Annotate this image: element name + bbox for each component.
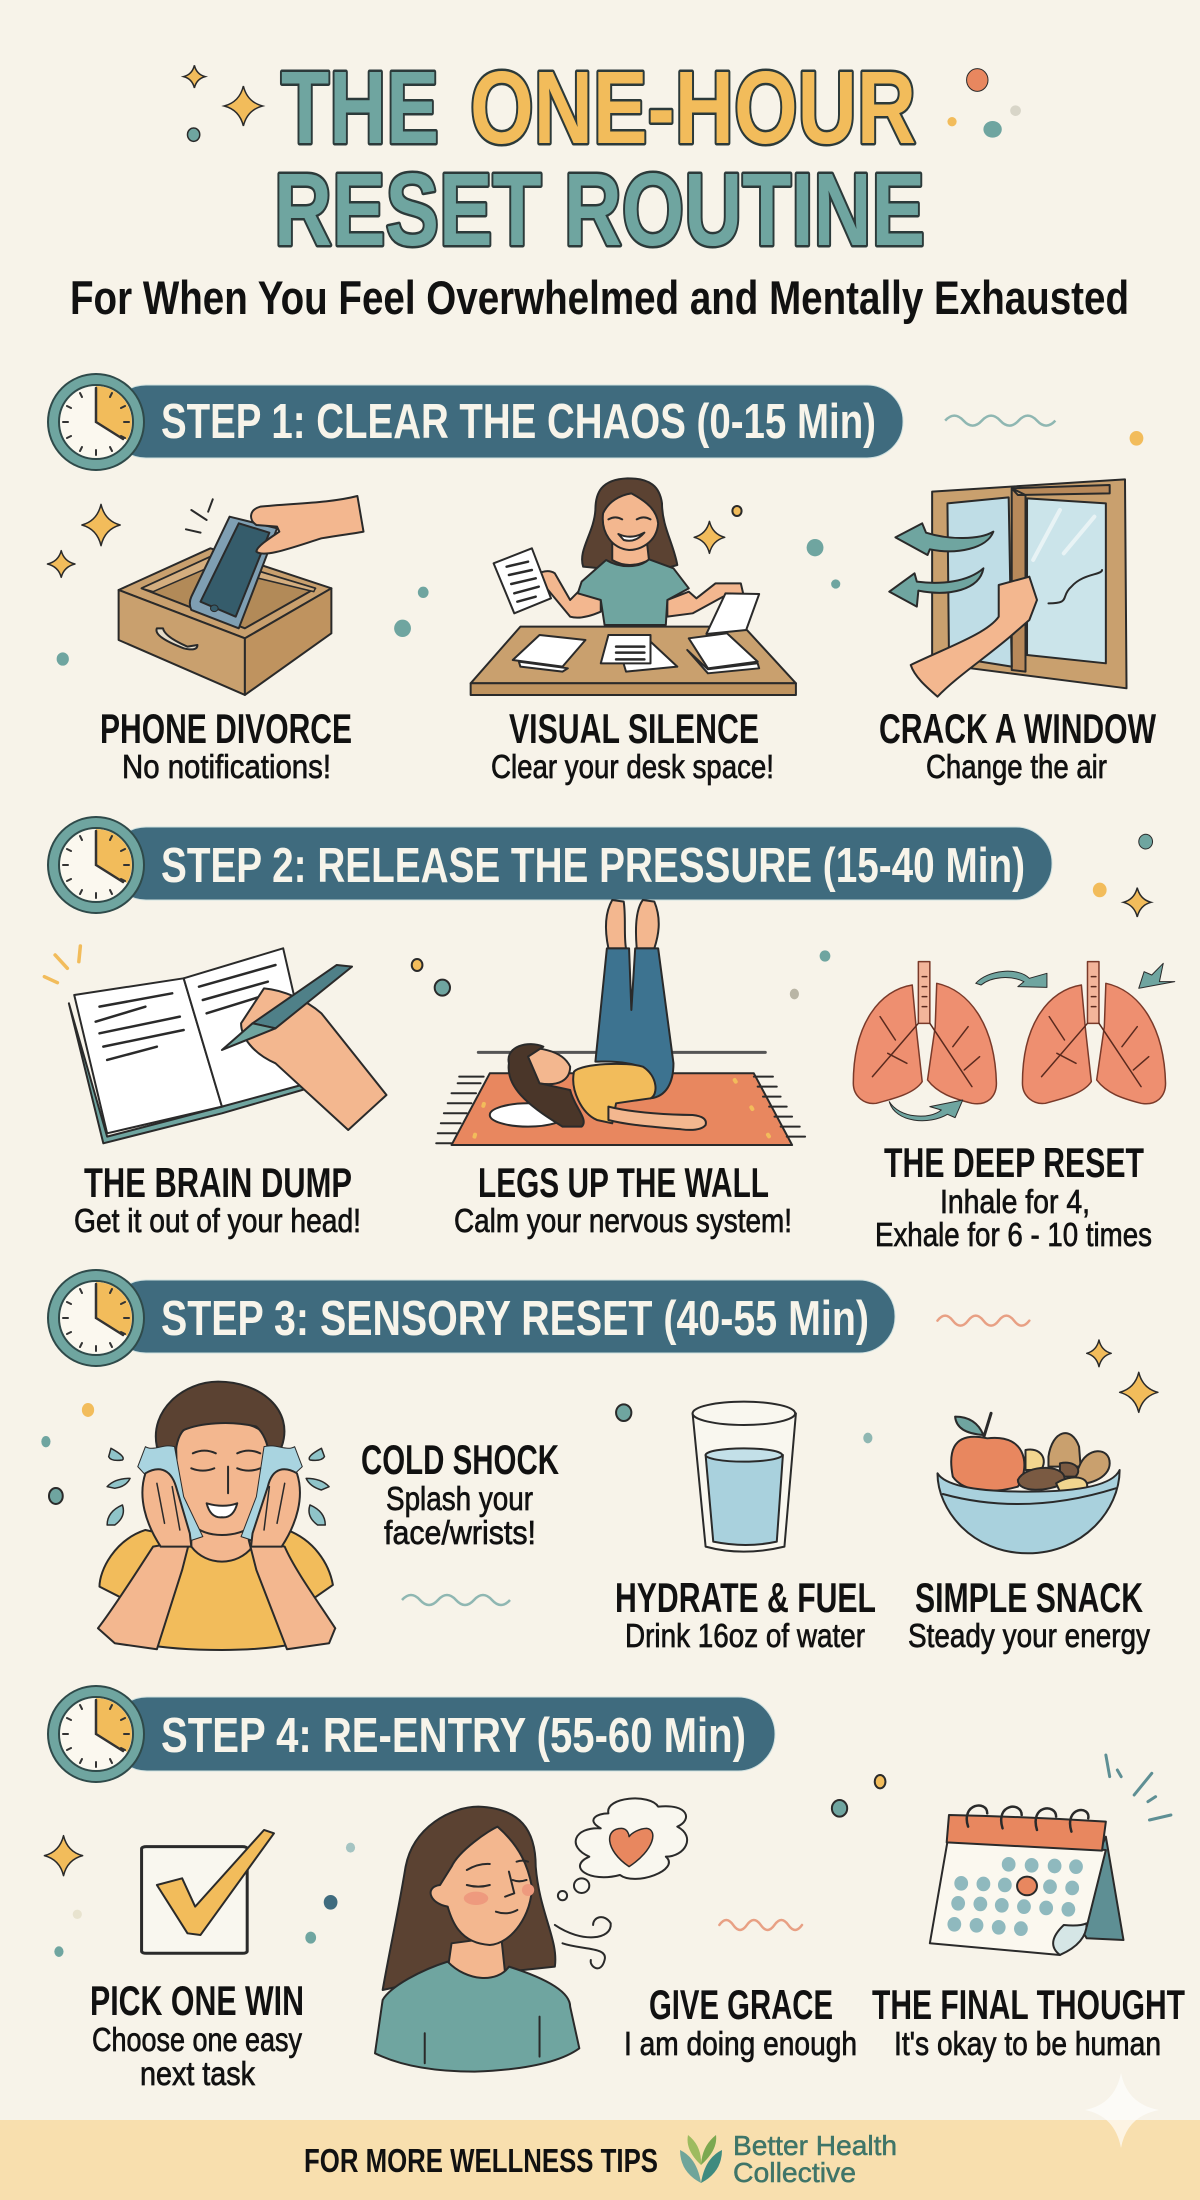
step 1 heading: STEP 1: CLEAR THE CHAOS (0-15 Min): [161, 395, 876, 449]
icon: checkbox: [44, 1830, 355, 1957]
label: PICK ONE WIN: [90, 1977, 304, 2024]
step 1 heading: [48, 374, 903, 470]
item: pick one win: [44, 1830, 355, 2092]
icon: opening window: [889, 479, 1127, 697]
item: cold shock: [41, 1382, 559, 1650]
panel: step 3: [41, 1270, 1158, 1654]
label: COLD SHOCK: [361, 1436, 559, 1483]
item: give grace: [375, 1798, 857, 2072]
step 2 heading: [48, 817, 1052, 913]
caption: Steady your energy: [908, 1617, 1150, 1654]
label: HYDRATE & FUEL: [615, 1574, 876, 1621]
caption: No notifications!: [122, 748, 331, 785]
panel: step 1: [47, 374, 1156, 785]
icon: woman clearing desk: [394, 478, 840, 695]
item: brain dump: [44, 946, 450, 1239]
title: [274, 50, 925, 267]
item: legs up the wall: [436, 900, 830, 1239]
caption line 2: face/wrists!: [384, 1514, 536, 1551]
caption: Inhale for 4,: [940, 1183, 1090, 1220]
title: ONE-HOUR: [470, 50, 916, 165]
caption line 2: next task: [140, 2055, 255, 2092]
caption: Splash your: [386, 1480, 533, 1517]
item: visual silence: [394, 478, 840, 785]
logo wordmark: Collective: [733, 2157, 856, 2188]
panel: step 4: [44, 1686, 1185, 2092]
caption: Calm your nervous system!: [454, 1202, 792, 1239]
item: phone divorce: [47, 496, 364, 785]
caption: Get it out of your head!: [74, 1202, 361, 1239]
step 3 heading: STEP 3: SENSORY RESET (40-55 Min): [161, 1292, 869, 1346]
item: hydrate and fuel: [615, 1402, 876, 1654]
item: deep reset: [853, 962, 1175, 1253]
icon: desk calendar: [832, 1755, 1171, 1955]
title: THE: [281, 50, 439, 165]
title decorations: [184, 65, 1143, 446]
label: PHONE DIVORCE: [100, 705, 352, 752]
logo wordmark: [733, 2130, 897, 2188]
item: final thought: [832, 1755, 1185, 2062]
caption: I am doing enough: [624, 2025, 857, 2062]
caption: Drink 16oz of water: [625, 1617, 865, 1654]
icon: calm woman with thought bubble: [375, 1798, 802, 2072]
call to action: FOR MORE WELLNESS TIPS: [304, 2142, 658, 2179]
icon: journal and pen: [44, 946, 450, 1143]
label: LEGS UP THE WALL: [478, 1159, 769, 1206]
logo wordmark: Better Health: [733, 2130, 897, 2161]
item: crack a window: [879, 479, 1156, 785]
label: THE BRAIN DUMP: [84, 1159, 352, 1206]
label: VISUAL SILENCE: [509, 705, 759, 752]
header: [70, 50, 1143, 446]
icon: lungs and breath arrows: [853, 962, 1175, 1121]
footer sparkle: [1085, 2073, 1159, 2148]
icon: bowl of fruit and nuts: [937, 1316, 1158, 1553]
icon: phone in drawer: [47, 496, 364, 695]
panel: step 2: [44, 817, 1175, 1253]
caption: Choose one easy: [92, 2021, 302, 2058]
label: GIVE GRACE: [649, 1981, 833, 2028]
step 2 decorations: [1093, 834, 1153, 917]
item: simple snack: [908, 1316, 1158, 1654]
icon: woman with legs up the wall: [436, 900, 830, 1145]
icon: logo leaves: [680, 2135, 722, 2183]
step 4 heading: [48, 1686, 775, 1782]
icon: glass of water: [616, 1402, 872, 1552]
wave: [402, 1595, 510, 1605]
title: RESET ROUTINE: [274, 152, 925, 267]
footer band: [0, 2120, 1200, 2200]
icon: person splashing face: [41, 1382, 335, 1650]
step 3 heading: [48, 1270, 895, 1366]
caption: Change the air: [926, 748, 1107, 785]
caption line 2: Exhale for 6 - 10 times: [875, 1216, 1152, 1253]
footer: [0, 2073, 1200, 2200]
caption: Clear your desk space!: [491, 748, 774, 785]
step 4 heading: STEP 4: RE-ENTRY (55-60 Min): [161, 1709, 746, 1763]
caption: It's okay to be human: [894, 2025, 1161, 2062]
